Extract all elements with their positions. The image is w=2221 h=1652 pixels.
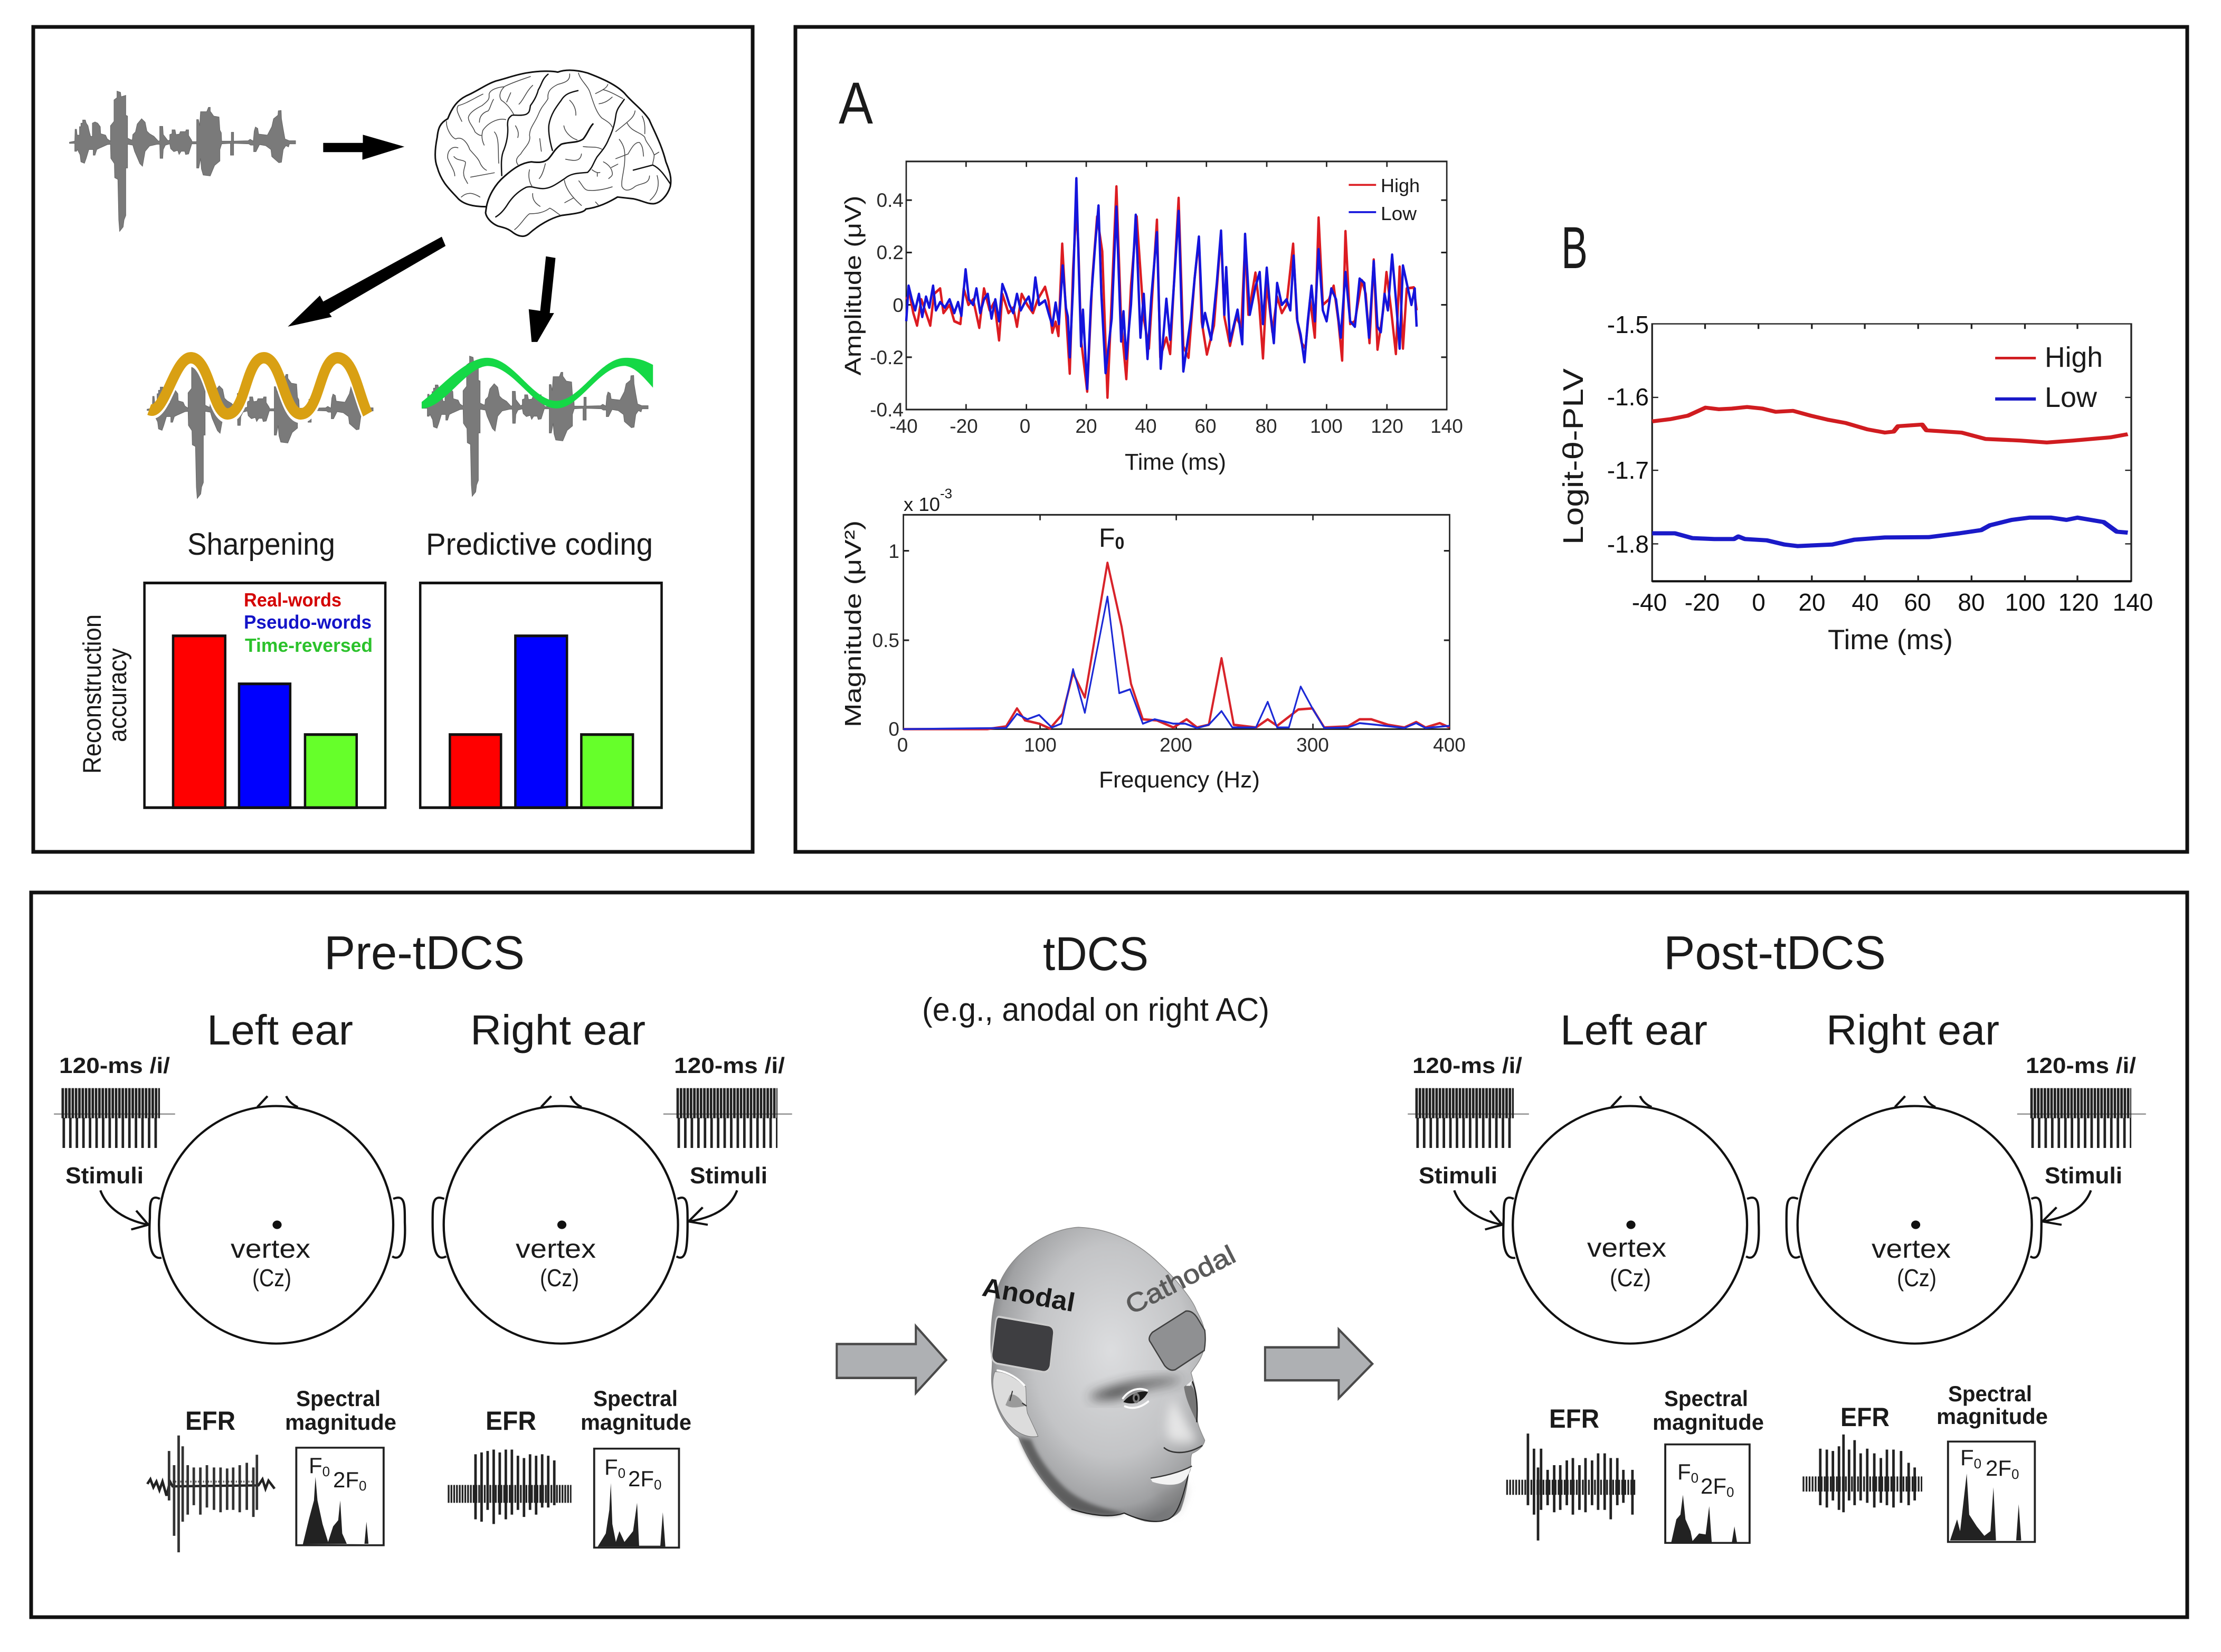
chart A1 axis labels: 0.4 (877, 189, 904, 211)
chart A1 axis labels: Time (ms) (1125, 449, 1226, 475)
waveform with predictive coding oscillation (422, 356, 653, 496)
post-tDCS text labels: (Cz) (1897, 1264, 1937, 1292)
post-tDCS F0 labels: F (1677, 1459, 1691, 1484)
pre-tDCS heads diagram (54, 1096, 792, 1344)
chart A1 axis labels: 40 (1135, 415, 1157, 437)
pre-tDCS text labels: magnitude (285, 1410, 396, 1435)
heading: Post-tDCS: Post-tDCS (1664, 927, 1886, 980)
post-tDCS text labels: magnitude (1937, 1404, 2048, 1429)
subheading: (e.g., anodal on right AC) (922, 992, 1269, 1028)
arrow: pre to tDCS (837, 1326, 946, 1393)
chart A2 axis labels: 300 (1296, 734, 1329, 756)
post-tDCS F0 labels: 0 (1726, 1484, 1734, 1500)
arrow: tDCS to post (1265, 1330, 1372, 1398)
chart A1 axis labels: 120 (1371, 415, 1403, 437)
panel: A and B results (795, 27, 2187, 852)
post-tDCS text labels: 120-ms /i/ (1412, 1053, 1522, 1078)
pre-tDCS text labels: (Cz) (252, 1264, 291, 1292)
pre-tDCS F0 labels (309, 1453, 661, 1494)
post-tDCS heads diagram (1408, 1096, 2146, 1344)
chart B axis labels: -20 (1685, 588, 1720, 616)
post-tDCS text labels: magnitude (1653, 1410, 1764, 1435)
chart B axis labels: 0 (1752, 588, 1766, 616)
post-tDCS text labels (1412, 1007, 2136, 1435)
chart A1 axis labels: 20 (1075, 415, 1097, 437)
chart A2 axis labels: 0 (888, 718, 899, 740)
pre-tDCS text labels: vertex (231, 1234, 310, 1264)
chart B axis labels: Logit-θ-PLV (1558, 368, 1589, 545)
pre-tDCS F0 labels: 2F (333, 1467, 359, 1492)
chart A1 axis labels: 140 (1430, 415, 1463, 437)
chart B axis labels: -1.7 (1607, 457, 1649, 484)
post-tDCS text labels: EFR (1840, 1402, 1890, 1432)
icon: head with electrodes (991, 1227, 1206, 1522)
y axis label: accuracy (104, 648, 132, 742)
pre-tDCS F0 labels: 0 (654, 1477, 661, 1493)
chart A1 axis labels: Low (1381, 203, 1417, 224)
pre-tDCS text labels: Right ear (470, 1007, 646, 1053)
post-tDCS text labels: vertex (1872, 1234, 1951, 1264)
pre-tDCS EFR waveforms and spectra (147, 1436, 679, 1552)
chart B axis labels: 60 (1904, 588, 1931, 616)
chart A2 axis labels: 200 (1160, 734, 1192, 756)
chart A2 axis labels: 100 (1024, 734, 1057, 756)
chart A1 axis labels: 60 (1194, 415, 1217, 437)
heading: tDCS: tDCS (1043, 928, 1149, 981)
post-tDCS F0 labels: 0 (2011, 1466, 2019, 1482)
chart B axis labels: 80 (1958, 588, 1985, 616)
chart A2 axis labels: 0 (897, 734, 908, 756)
chart A2 axis labels: -3 (940, 486, 952, 501)
chart B axis labels: 40 (1852, 588, 1879, 616)
pre-tDCS F0 labels: F (309, 1453, 322, 1478)
arrow: brain to sharpening (288, 236, 445, 327)
post-tDCS F0 labels: 0 (1974, 1456, 1981, 1471)
post-tDCS text labels: Stimuli (2045, 1163, 2122, 1189)
post-tDCS F0 labels: F (1960, 1445, 1974, 1470)
chart B axis labels: High (2045, 341, 2103, 373)
chart A2 axis labels: 400 (1433, 734, 1466, 756)
waveform with sharpening oscillation (147, 358, 373, 498)
pre-tDCS F0 labels: F (604, 1455, 618, 1479)
pre-tDCS text labels: Stimuli (65, 1163, 144, 1189)
chart B axis labels: -1.8 (1607, 530, 1649, 558)
pre-tDCS text labels: Spectral (593, 1386, 678, 1411)
heading: Pre-tDCS: Pre-tDCS (324, 927, 525, 980)
post-tDCS text labels: (Cz) (1610, 1264, 1651, 1292)
pre-tDCS F0 labels: 0 (322, 1464, 330, 1479)
chart B axis labels: -40 (1632, 588, 1667, 616)
pre-tDCS text labels: (Cz) (540, 1264, 579, 1292)
chart A1 axis labels: -0.4 (870, 399, 904, 421)
chart A2 axis labels: Frequency (Hz) (1099, 767, 1260, 793)
chart B axis labels (1558, 311, 2153, 656)
pre-tDCS text labels: magnitude (581, 1410, 691, 1435)
chart B axis labels: 20 (1798, 588, 1826, 616)
label A: A (839, 70, 873, 136)
line chart: amplitude vs time (906, 162, 1447, 410)
post-tDCS text labels: vertex (1587, 1233, 1666, 1262)
arrow: waveform to brain (323, 135, 404, 160)
pre-tDCS text labels: EFR (185, 1406, 235, 1436)
post-tDCS F0 labels: 0 (1691, 1470, 1698, 1486)
speech waveform input (70, 91, 296, 231)
pre-tDCS text labels: 120-ms /i/ (674, 1053, 785, 1078)
pre-tDCS text labels: Left ear (207, 1007, 353, 1053)
pre-tDCS F0 labels: 0 (359, 1478, 366, 1494)
bar chart: predictive coding (420, 583, 662, 808)
pre-tDCS text labels: vertex (516, 1234, 596, 1264)
pre-tDCS F0 labels: 0 (618, 1465, 625, 1481)
chart B axis labels: 120 (2058, 588, 2099, 616)
line chart: magnitude vs frequency (904, 515, 1449, 729)
pre-tDCS text labels: Stimuli (690, 1163, 767, 1189)
label: anodal: Anodal (980, 1272, 1077, 1317)
post-tDCS F0 labels: 2F (1986, 1456, 2011, 1480)
chart A1 axis labels: -40 (889, 415, 918, 437)
post-tDCS text labels: Spectral (1664, 1386, 1748, 1411)
chart A2 axis labels: Magnitude (μV²) (840, 520, 866, 727)
post-tDCS F0 labels (1677, 1445, 2019, 1500)
post-tDCS text labels: Left ear (1560, 1007, 1707, 1053)
chart A2 axis labels: 0.5 (872, 630, 899, 651)
bar chart: sharpening (145, 583, 385, 808)
chart A1 axis labels: 100 (1310, 415, 1343, 437)
chart A2 axis labels: x 10 (904, 493, 940, 515)
panel: tDCS protocol (31, 893, 2187, 1617)
heading: predictive coding: Predictive coding (426, 527, 653, 562)
legend (244, 589, 373, 656)
chart A1 axis labels (840, 175, 1463, 475)
pre-tDCS F0 labels: 2F (628, 1466, 654, 1491)
chart A2 axis labels: F (1099, 523, 1115, 553)
legend: Real-words (244, 589, 341, 611)
legend: Time-reversed (245, 634, 373, 656)
pre-tDCS text labels (59, 1007, 785, 1436)
post-tDCS text labels: Spectral (1948, 1381, 2032, 1406)
label: cathodal: Cathodal (1121, 1240, 1240, 1320)
chart B axis labels: -1.5 (1607, 311, 1649, 338)
chart A1 axis labels: 0 (893, 295, 904, 316)
y axis label: Reconstruction (79, 614, 107, 774)
chart A1 axis labels: -20 (950, 415, 978, 437)
legend: Pseudo-words (244, 611, 372, 633)
post-tDCS text labels: EFR (1549, 1404, 1599, 1433)
line chart: logit theta PLV (1652, 324, 2131, 581)
pre-tDCS text labels: Spectral (296, 1386, 381, 1411)
post-tDCS F0 labels: 2F (1701, 1474, 1726, 1498)
chart B axis labels: Time (ms) (1828, 624, 1953, 656)
post-tDCS text labels: Right ear (1826, 1007, 1999, 1053)
chart A1 axis labels: 0.2 (877, 242, 904, 263)
chart A1 axis labels: -0.2 (870, 347, 904, 368)
chart A1 axis labels: High (1381, 175, 1420, 196)
chart A2 axis labels: 0 (1115, 534, 1124, 553)
post-tDCS EFR waveforms and spectra (1506, 1433, 2035, 1543)
chart A2 axis labels: 1 (888, 540, 899, 562)
pre-tDCS text labels: EFR (486, 1406, 536, 1436)
icon: brain (435, 70, 671, 236)
chart A1 axis labels: 0 (1020, 415, 1030, 437)
post-tDCS text labels: 120-ms /i/ (2026, 1053, 2136, 1078)
panel: sharpening vs predictive coding (33, 27, 753, 852)
pre-tDCS text labels: 120-ms /i/ (59, 1053, 170, 1078)
heading: sharpening: Sharpening (187, 527, 335, 562)
label B: B (1561, 215, 1588, 281)
arrow: brain to predictive coding (529, 257, 555, 342)
chart A1 axis labels: 80 (1255, 415, 1277, 437)
y axis label (79, 614, 132, 774)
chart B axis labels: -1.6 (1607, 383, 1649, 411)
chart B axis labels: 100 (2005, 588, 2045, 616)
chart A2 axis labels (840, 486, 1466, 793)
chart A1 axis labels: Amplitude (μV) (840, 195, 866, 376)
chart B axis labels: Low (2045, 382, 2097, 413)
post-tDCS text labels: Stimuli (1419, 1163, 1497, 1189)
chart B axis labels: 140 (2113, 588, 2153, 616)
